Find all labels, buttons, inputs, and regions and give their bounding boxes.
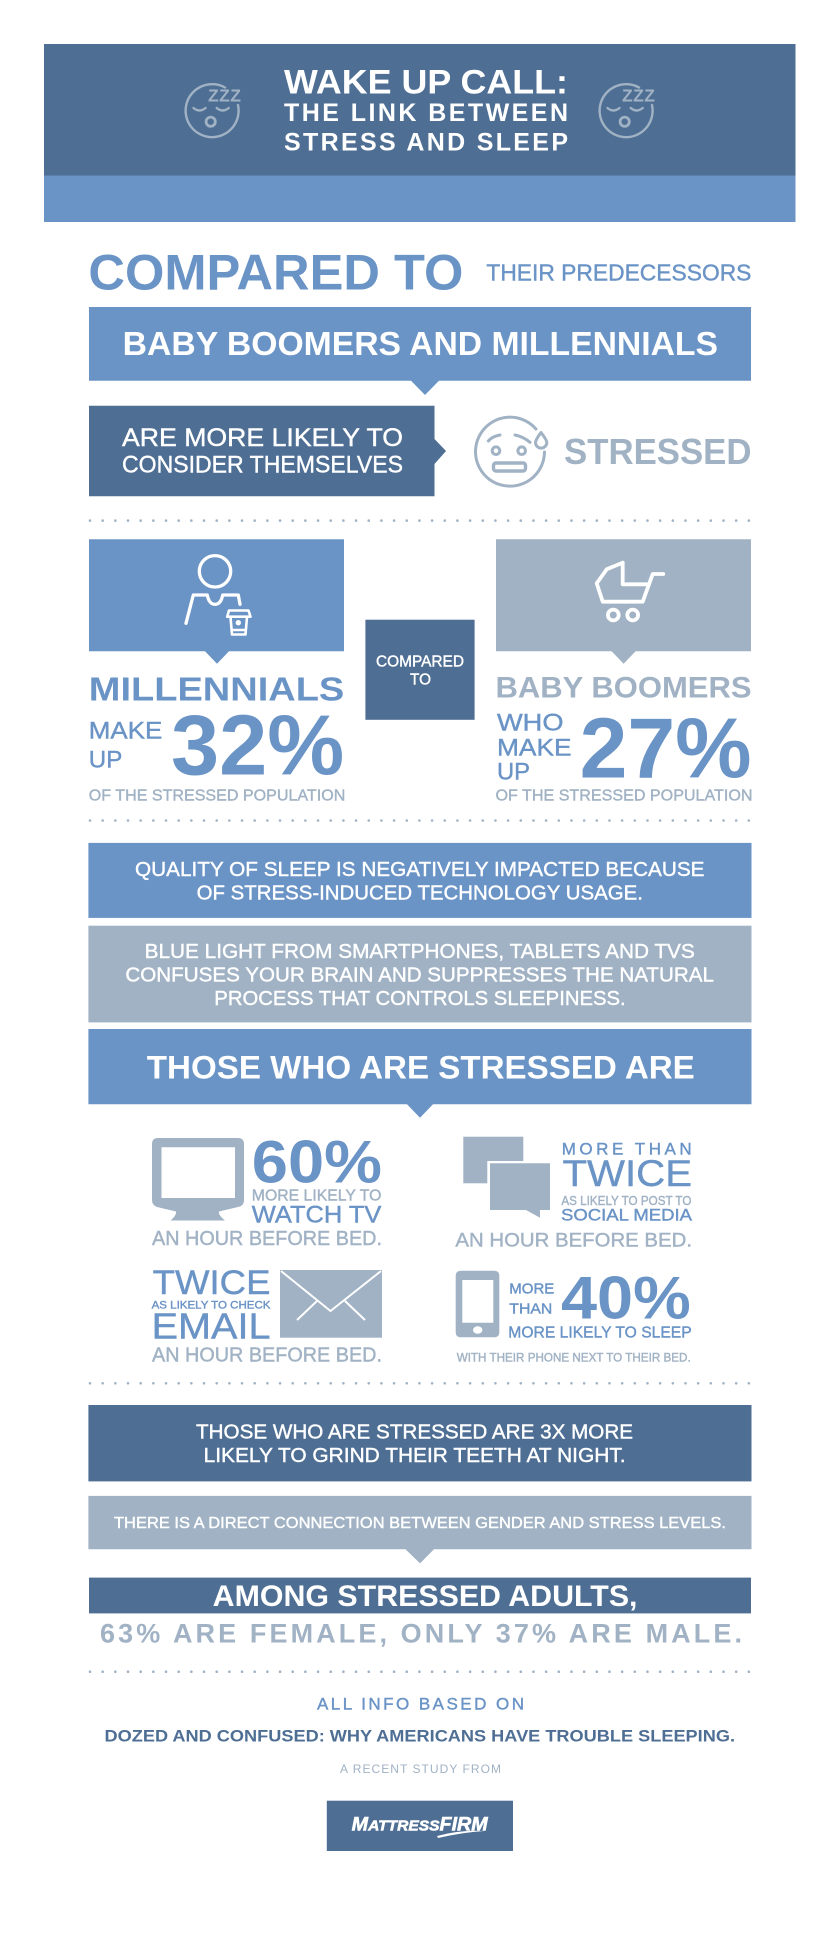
icon: millennial with coffee bbox=[186, 556, 250, 634]
stat: twice email: AS LIKELY TO CHECK bbox=[152, 1299, 271, 1311]
logo: mattress firm bbox=[327, 1801, 513, 1851]
icon: stressed face bbox=[476, 417, 547, 486]
header banner bbox=[44, 44, 796, 222]
text: source credits: ALL INFO BASED ON bbox=[317, 1694, 524, 1713]
panel: those who are stressed are bbox=[88, 1029, 751, 1118]
text block: baby boomers 27%: OF THE STRESSED POPULATION bbox=[496, 788, 752, 805]
icon: speech bubbles bbox=[463, 1137, 553, 1223]
panel: compared to box: TO bbox=[410, 672, 431, 689]
stat: 60% watch tv: WATCH TV bbox=[252, 1201, 381, 1228]
panel: blue light: BLUE LIGHT FROM SMARTPHONES, TABLETS AND TVS bbox=[145, 940, 695, 963]
panel: are more likely to consider themselves bbox=[89, 406, 446, 496]
stat: twice email: TWICE bbox=[153, 1264, 270, 1302]
panel: gender connection bbox=[88, 1496, 751, 1563]
panel: are more likely to consider themselves: CONSIDER THEMSELVES bbox=[122, 452, 403, 479]
stat: 60% watch tv: AN HOUR BEFORE BED. bbox=[152, 1228, 382, 1250]
panel: among stressed adults: AMONG STRESSED ADULTS, bbox=[213, 1580, 637, 1613]
stat: more than 40% sleep with phone bbox=[456, 1265, 692, 1365]
text block: baby boomers 27%: MAKE bbox=[497, 735, 572, 762]
panel: blue light: PROCESS THAT CONTROLS SLEEPINESS. bbox=[214, 987, 626, 1010]
panel: baby boomers and millennials bbox=[89, 307, 751, 395]
title: THE LINK BETWEEN bbox=[284, 99, 568, 127]
panel: gender connection: THERE IS A DIRECT CONNECTION BETWEEN GENDER AND STRESS LEVELS. bbox=[114, 1515, 726, 1532]
panel: baby boomers and millennials: BABY BOOMERS AND MILLENNIALS bbox=[123, 325, 718, 362]
stat: twice email bbox=[152, 1264, 382, 1367]
panel: grind teeth bbox=[88, 1405, 751, 1481]
stat: more than twice social media: SOCIAL MEDIA bbox=[561, 1206, 693, 1225]
stat: more than 40% sleep with phone: MORE LIKELY TO SLEEP bbox=[508, 1324, 692, 1341]
icon: sleeping face right bbox=[600, 84, 655, 137]
panel: grind teeth: THOSE WHO ARE STRESSED ARE 3X MORE bbox=[196, 1422, 633, 1444]
heading: compared to their predecessors: THEIR PREDECESSORS bbox=[486, 260, 751, 286]
text block: millennials 32%: OF THE STRESSED POPULATION bbox=[89, 788, 345, 805]
text block: baby boomers 27%: 27% bbox=[580, 701, 752, 796]
icon: sleeping face left: ZZZ bbox=[208, 86, 241, 106]
heading: compared to their predecessors bbox=[88, 245, 751, 301]
stat: more than twice social media: MORE THAN bbox=[562, 1139, 692, 1158]
icon: television bbox=[152, 1138, 244, 1220]
text block: millennials 32%: UP bbox=[89, 747, 122, 774]
text block: millennials 32%: MILLENNIALS bbox=[89, 671, 344, 708]
panel: baby boomers icon box bbox=[496, 539, 751, 664]
panel: quality of sleep: QUALITY OF SLEEP IS NEGATIVELY IMPACTED BECAUSE bbox=[135, 858, 704, 881]
text block: baby boomers 27%: WHO bbox=[497, 709, 564, 736]
stat: more than 40% sleep with phone: 40% bbox=[561, 1265, 691, 1332]
stat: more than twice social media bbox=[455, 1137, 693, 1252]
text block: baby boomers 27%: BABY BOOMERS bbox=[496, 672, 752, 704]
panel: quality of sleep bbox=[88, 843, 751, 918]
stat: more than 40% sleep with phone: MORE bbox=[509, 1281, 555, 1297]
stat: 60% watch tv: 60% bbox=[252, 1128, 382, 1195]
text block: baby boomers 27% bbox=[496, 672, 752, 805]
stat: more than twice social media: AS LIKELY TO POST TO bbox=[561, 1194, 692, 1208]
panel: those who are stressed are: THOSE WHO ARE STRESSED ARE bbox=[147, 1049, 695, 1085]
panel: are more likely to consider themselves: ARE MORE LIKELY TO bbox=[122, 424, 403, 452]
text block: millennials 32%: MAKE bbox=[89, 717, 162, 744]
stat: 60% watch tv bbox=[152, 1128, 382, 1250]
stat: more than twice social media: AN HOUR BEFORE BED. bbox=[455, 1230, 692, 1252]
panel: blue light bbox=[88, 926, 751, 1022]
icon: smartphone bbox=[456, 1271, 499, 1337]
text: gender percentages: 63% ARE FEMALE, ONLY 37% ARE MALE. bbox=[100, 1618, 742, 1648]
icon: envelope bbox=[280, 1270, 382, 1338]
stat: twice email: EMAIL bbox=[152, 1305, 270, 1346]
panel: blue light: CONFUSES YOUR BRAIN AND SUPPRESSES THE NATURAL bbox=[125, 964, 714, 986]
panel: compared to box: COMPARED bbox=[376, 654, 464, 671]
heading: compared to their predecessors: COMPARED TO bbox=[88, 245, 463, 301]
panel: compared to box bbox=[365, 620, 475, 720]
icon: sleeping face left bbox=[186, 84, 241, 137]
text: source credits bbox=[104, 1694, 735, 1776]
panel: grind teeth: LIKELY TO GRIND THEIR TEETH AT NIGHT. bbox=[204, 1445, 626, 1467]
text block: millennials 32% bbox=[89, 671, 345, 805]
panel: among stressed adults bbox=[89, 1578, 751, 1613]
stat: more than twice social media: TWICE bbox=[562, 1153, 692, 1194]
title: STRESS AND SLEEP bbox=[284, 128, 568, 156]
icon: sleeping face right: ZZZ bbox=[622, 86, 655, 106]
panel: millennials icon box bbox=[89, 539, 344, 664]
label: stressed: STRESSED bbox=[564, 431, 752, 472]
text block: millennials 32%: 32% bbox=[171, 698, 344, 794]
stat: 60% watch tv: MORE LIKELY TO bbox=[252, 1188, 381, 1205]
title: WAKE UP CALL: bbox=[284, 64, 568, 102]
text: source credits: A RECENT STUDY FROM bbox=[340, 1762, 501, 1776]
stat: twice email: AN HOUR BEFORE BED. bbox=[152, 1345, 382, 1367]
stat: more than 40% sleep with phone: WITH THEIR PHONE NEXT TO THEIR BED. bbox=[457, 1351, 691, 1365]
icon: baby stroller bbox=[597, 563, 663, 620]
title bbox=[284, 64, 568, 156]
text block: baby boomers 27%: UP bbox=[497, 759, 530, 786]
panel: quality of sleep: OF STRESS-INDUCED TECHNOLOGY USAGE. bbox=[197, 882, 643, 905]
stat: more than 40% sleep with phone: THAN bbox=[509, 1301, 552, 1317]
text: source credits: DOZED AND CONFUSED: WHY AMERICANS HAVE TROUBLE SLEEPING. bbox=[104, 1727, 735, 1746]
logo: mattress firm: MATTRESSFIRM bbox=[352, 1815, 489, 1836]
